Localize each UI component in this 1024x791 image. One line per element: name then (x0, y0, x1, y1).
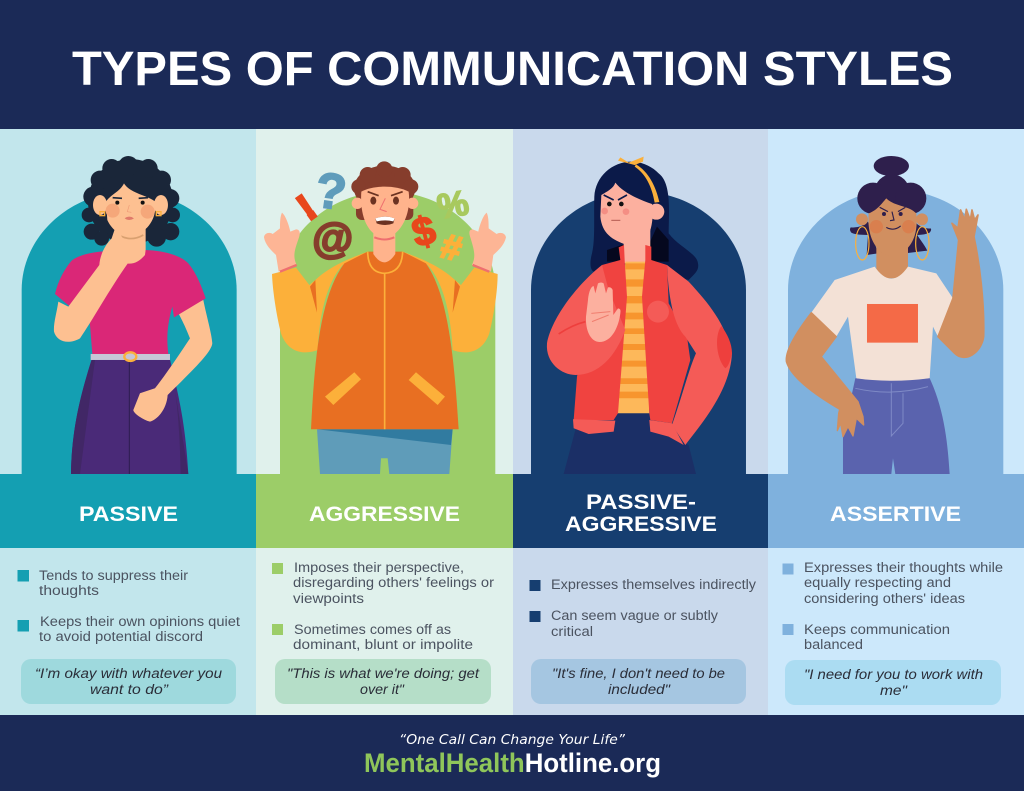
quote: passive: want to do” (90, 682, 169, 697)
white t-shirt (811, 267, 953, 382)
quote: passive (21, 659, 236, 704)
header band: passive-aggressive: PASSIVE- (586, 490, 696, 514)
bullets: passive: Keeps their own opinions quiet (40, 614, 240, 629)
header band: aggressive (256, 474, 513, 548)
illustration: assertive woman with arch (786, 156, 1003, 475)
bullets: passive: to avoid potential discord (39, 629, 203, 644)
left arm on hip (786, 313, 864, 437)
tagline: “One Call Can Change Your Life” (399, 732, 626, 748)
header band: assertive: ASSERTIVE (830, 502, 961, 526)
jeans (843, 378, 950, 474)
skirt (71, 359, 188, 474)
quote: assertive: me" (880, 683, 908, 698)
quote: passive-aggressive (531, 659, 746, 704)
face (868, 198, 917, 256)
bullets: aggressive: viewpoints (293, 591, 364, 606)
bullets: assertive: Expresses their thoughts while (804, 560, 1003, 575)
bullets: aggressive: Sometimes comes off as (294, 622, 451, 637)
header band: passive (0, 474, 256, 548)
bullets: passive-aggressive (530, 577, 756, 639)
quote: passive-aggressive: included" (608, 682, 671, 697)
illustration: aggressive man with arch (264, 161, 506, 475)
striped shirt (617, 262, 649, 413)
arch: passive-aggressive (531, 192, 746, 475)
header band: aggressive: AGGRESSIVE (309, 502, 460, 526)
symbols: % (434, 183, 472, 227)
bullets: passive-aggressive: Expresses themselves indirectly (551, 577, 756, 592)
orange jacket (311, 252, 459, 429)
face (600, 183, 653, 245)
bullets: passive-aggressive: critical (551, 624, 593, 639)
pink shirt (55, 250, 206, 354)
headband (618, 157, 659, 203)
panel: aggressive background (256, 129, 513, 715)
panel: assertive background (768, 129, 1024, 715)
symbols: ? (312, 161, 350, 221)
arch: aggressive (280, 192, 495, 475)
red jacket (574, 245, 690, 423)
quote: passive-aggressive: "It's fine, I don't need to be (552, 666, 725, 681)
symbols (290, 161, 472, 269)
header band: passive: PASSIVE (79, 502, 178, 526)
bullets: assertive: considering others' ideas (804, 591, 965, 606)
arm and hand on chin (54, 228, 129, 342)
title banner (0, 0, 1024, 129)
pants (564, 413, 696, 474)
left hand (264, 213, 300, 272)
hair (850, 156, 931, 255)
panel: passive-aggressive background (513, 129, 768, 715)
bullets: passive: thoughts (39, 583, 99, 598)
quote: aggressive (275, 659, 491, 704)
hair (590, 162, 698, 280)
arch: assertive (788, 190, 1003, 475)
symbols: $ (407, 208, 440, 256)
hair (351, 161, 418, 220)
illustration: passive woman with arch (22, 156, 237, 475)
logo text: MentalHealthHotline.org (364, 748, 661, 778)
title: TYPES OF COMMUNICATION STYLES (72, 43, 953, 96)
symbols: @ (312, 215, 353, 262)
bullets: assertive: equally respecting and (804, 575, 951, 590)
quote: assertive (785, 660, 1001, 705)
symbols: ! (290, 187, 323, 228)
bullets: assertive: Keeps communication (804, 622, 950, 637)
jeans (317, 429, 453, 474)
right arm and waving hand (938, 209, 984, 357)
panel: passive background (0, 129, 256, 715)
yellow sleeves (272, 252, 368, 352)
bullets: passive: Tends to suppress their (39, 568, 189, 583)
right hand (469, 213, 506, 272)
quote: assertive: "I need for you to work with (804, 667, 983, 682)
bullets: passive-aggressive: Can seem vague or subtly (551, 608, 718, 623)
header band: passive-aggressive (513, 474, 768, 548)
arm on skirt (133, 300, 212, 422)
bullets: aggressive: dominant, blunt or impolite (293, 637, 473, 652)
bullets: assertive (782, 560, 1003, 652)
quote: aggressive: over it" (360, 682, 405, 697)
raised palm (586, 282, 621, 342)
belt (91, 352, 170, 361)
header band: assertive (768, 474, 1024, 548)
bullets: aggressive: disregarding others' feelings or (293, 575, 495, 590)
bullets: aggressive (272, 560, 495, 652)
symbols: # (437, 226, 466, 269)
bullets: assertive: balanced (804, 637, 863, 652)
footer (0, 715, 1024, 791)
illustration: passive-aggressive woman with arch (531, 157, 746, 475)
header band: passive-aggressive: AGGRESSIVE (565, 512, 717, 536)
shirt patch (867, 304, 918, 343)
bullets: passive (18, 568, 240, 644)
arch: passive (22, 192, 237, 475)
quote: passive: “I’m okay with whatever you (35, 666, 223, 681)
quote: aggressive: "This is what we're doing; get (287, 666, 480, 681)
bullets: aggressive: Imposes their perspective, (294, 560, 464, 575)
